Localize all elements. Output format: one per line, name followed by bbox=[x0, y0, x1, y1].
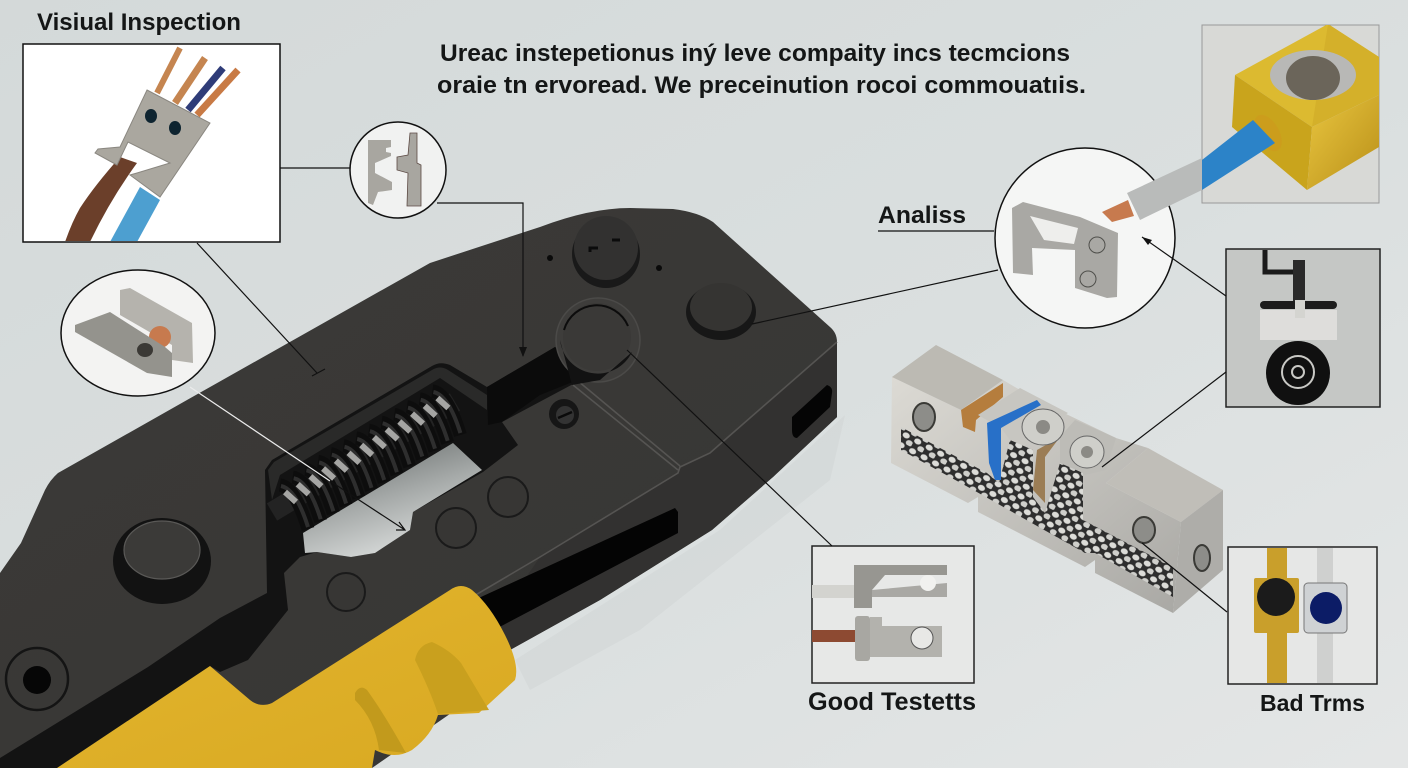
tool side face bbox=[490, 342, 837, 650]
panel: bad terminals bbox=[1228, 547, 1377, 684]
cavity upper wall bbox=[268, 368, 487, 500]
second middle block bbox=[1060, 420, 1116, 475]
screw one bbox=[1022, 409, 1064, 445]
yellow handle bbox=[57, 586, 516, 768]
callout circle: analysis terminal bbox=[995, 148, 1202, 328]
3D metal crimp block bbox=[891, 345, 1223, 613]
spring window dark cavity and channel bbox=[0, 347, 590, 768]
spring rod bbox=[272, 402, 455, 512]
light opening bbox=[303, 443, 482, 557]
panel: textured metal close-up bbox=[1226, 249, 1380, 407]
large pivot bbox=[556, 298, 640, 385]
small screw bbox=[549, 399, 579, 429]
pivot recess channel bbox=[487, 347, 590, 425]
pin holes bbox=[327, 477, 528, 611]
block front faces bbox=[891, 377, 1181, 613]
spring coils bbox=[280, 391, 460, 529]
middle block top bbox=[978, 388, 1068, 440]
exposed copper strands bbox=[1102, 200, 1134, 222]
block top left face bbox=[892, 345, 1003, 410]
label: analysis: Analiss bbox=[878, 202, 966, 229]
small dots bbox=[547, 255, 662, 271]
label: bad terminals: Bad Trms bbox=[1260, 690, 1365, 716]
tool body bbox=[0, 208, 837, 768]
copper slot two bbox=[1033, 437, 1060, 503]
icon: wires bbox=[65, 48, 238, 242]
intro text: oraie tn ervoread. We preceinution rocoi commouatıis. bbox=[437, 72, 1086, 99]
callout circle: crimp close-up bbox=[61, 270, 215, 396]
label: good terminals: Good Testetts bbox=[808, 688, 976, 716]
panel: good terminals bbox=[812, 546, 974, 683]
crimping tool bbox=[0, 208, 845, 768]
left button bbox=[113, 518, 211, 604]
intro text: Ureac instepetionus iný leve compaity incs tecmcions bbox=[440, 40, 1070, 67]
block top right face bbox=[1106, 448, 1223, 522]
block right side face bbox=[1173, 490, 1223, 613]
plate edge highlights bbox=[462, 342, 837, 603]
handle groove large bbox=[415, 642, 489, 714]
title: Visual Inspection: Visiual Inspection bbox=[37, 9, 241, 36]
white leader arrow bbox=[190, 387, 330, 481]
crushed strand band bbox=[901, 427, 1173, 597]
handle grooves bbox=[355, 688, 406, 753]
black leader arrow bbox=[330, 481, 405, 530]
tool shadow bbox=[515, 415, 845, 690]
icon: metal terminal bbox=[95, 90, 210, 197]
right button bbox=[686, 283, 756, 340]
slot bbox=[470, 508, 678, 632]
callout circle: jaw profile bbox=[350, 122, 446, 218]
intro text bbox=[437, 40, 1086, 99]
left block recess bbox=[961, 383, 1003, 432]
blue insert bbox=[987, 400, 1041, 480]
leader lines bbox=[197, 168, 1227, 612]
end holes bbox=[913, 403, 1210, 571]
icon: grey sheathed wire bbox=[1127, 158, 1202, 220]
screw two bbox=[1070, 436, 1104, 468]
bottom left screw bbox=[6, 648, 68, 710]
top button bbox=[572, 216, 640, 288]
panel: gold block photo bbox=[1202, 24, 1379, 203]
panel: visual inspection photo bbox=[23, 44, 280, 242]
arrowheads bbox=[519, 237, 1152, 357]
side hole bbox=[792, 385, 832, 438]
